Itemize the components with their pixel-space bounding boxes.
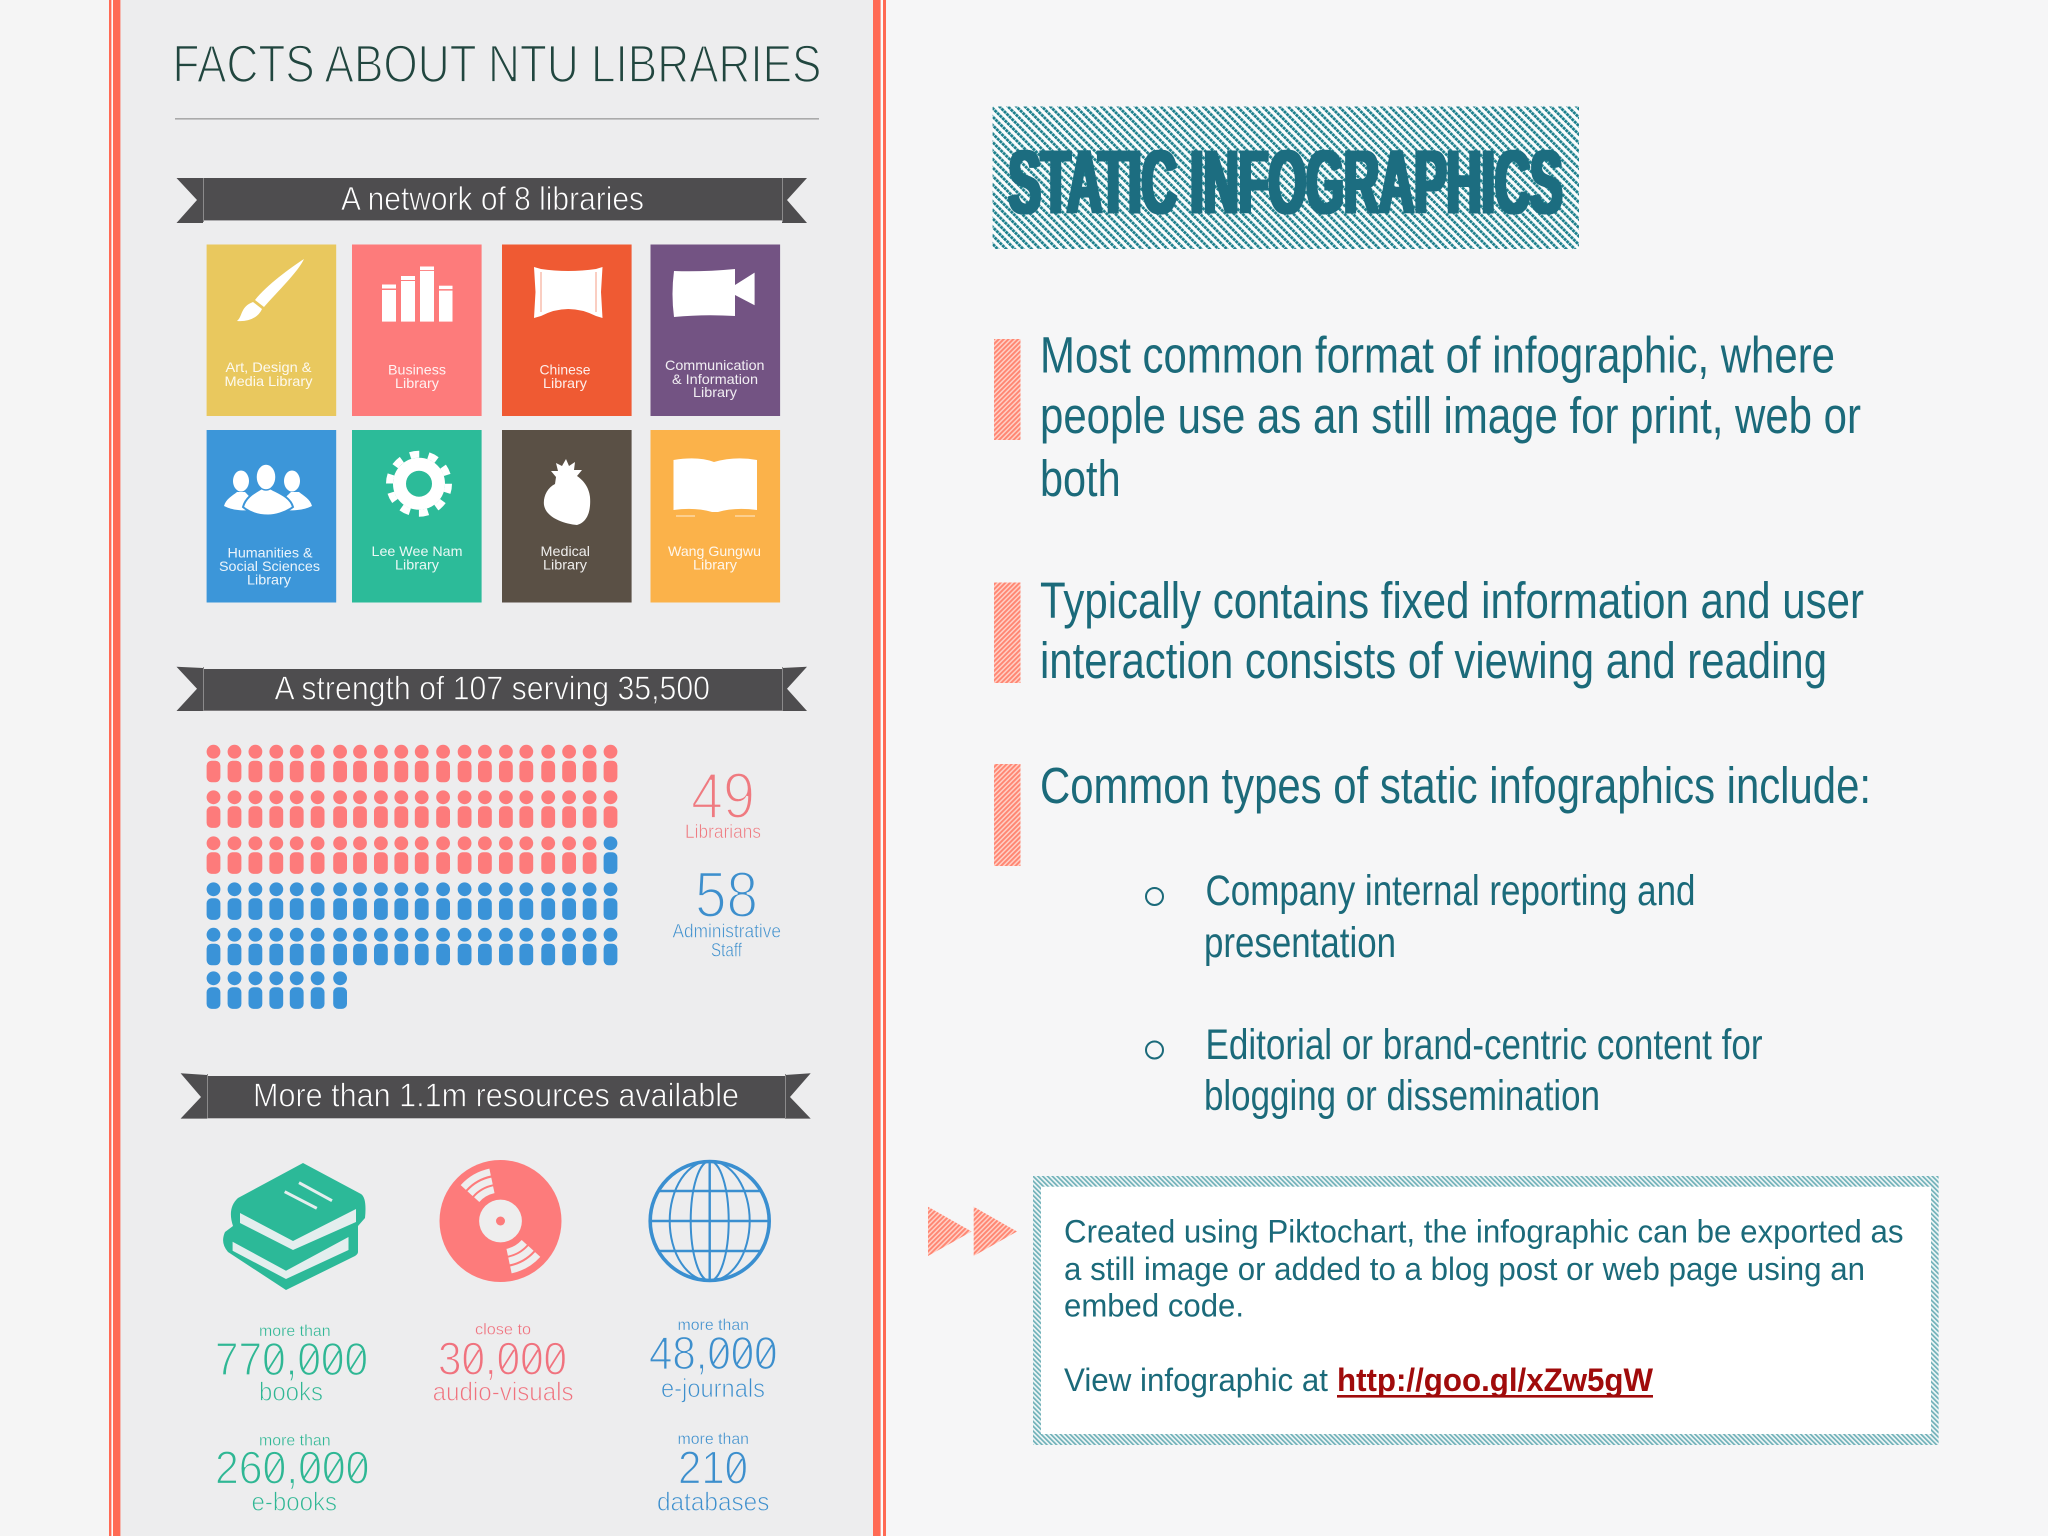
stat: 48,000 e-journals: more than [678,1317,749,1334]
stat: 48,000 e-journals: 48,000 [649,1327,778,1379]
stat: 260,000 e-books: more than [259,1433,331,1450]
tile label: Library [693,556,737,572]
stat: 30,000 audio-visuals: audio-visuals [433,1377,574,1407]
tile label [665,357,764,400]
tile label [219,545,320,588]
chart: staff people pictogram [207,745,620,1009]
stat: 49 librarians: Librarians [685,822,761,843]
sub bullet: company reporting: Company internal reporting and [1206,867,1696,915]
stat: 48,000 e-journals: e-journals [661,1373,765,1403]
text block: common types: Common types of static infographics include: [1040,757,1871,814]
icon: group of people [224,464,312,516]
library tile: Communication and Information [650,244,780,416]
tile label: Social Sciences [219,558,320,574]
library tile: Business [352,244,482,416]
tile label [540,543,590,572]
stat: 58 administrative staff: Staff [711,941,743,962]
bullet marker 2 [994,582,1020,683]
stat: 770,000 books [215,1323,368,1407]
tile label: Medical [540,543,590,559]
tile label: Library [693,384,737,400]
tile label: Business [388,361,446,377]
tile label [388,361,446,391]
icon: stacked books [223,1163,366,1290]
stat: 210 databases: more than [678,1431,749,1448]
tile label [372,543,462,572]
ribbon: strength of 107: A strength of 107 serving 35,500 [274,669,710,706]
text block: most common format: Most common format of infographic, where [1040,327,1835,384]
icon: open book [674,458,757,516]
library tile: Chinese [502,244,632,416]
tile label: Chinese [540,361,591,377]
stat: 770,000 books: books [259,1377,323,1407]
icon: vinyl disc [440,1160,562,1282]
tile label: Library [543,375,587,391]
stat: 210 databases: 210 [678,1441,748,1493]
bullet marker 1 [994,339,1020,440]
tile label [668,543,761,572]
library tile: Humanities and Social Sciences [207,430,336,602]
bullet marker 3 [994,764,1020,866]
stat: 210 databases [657,1431,769,1517]
text block: fixed information [1040,572,1864,689]
sub bullet: editorial content [1146,1021,1762,1120]
icon: paint brush [237,259,304,321]
tile label: Lee Wee Nam [372,543,462,559]
callout: created using Piktochart [1033,1176,1939,1445]
library tile: Wang Gungwu [650,430,780,602]
stat: 48,000 e-journals [649,1317,778,1403]
heading: static infographics: STATIC INFOGRAPHICS [1008,133,1562,233]
sub bullet: company reporting: presentation [1204,919,1396,967]
stat: 260,000 e-books [215,1433,369,1517]
tile label [540,361,591,391]
callout: created using Piktochart: Created using Piktochart, the infographic can be exported as [1064,1214,1904,1250]
icon: video camera [672,269,755,317]
icon: globe [650,1161,770,1281]
stat: 30,000 audio-visuals: close to [475,1321,531,1338]
library tile: Lee Wee Nam [352,430,482,602]
text block: most common format: both [1040,450,1121,507]
ribbon: network of 8 libraries [176,178,807,223]
stat: 260,000 e-books: e-books [252,1487,337,1517]
ribbon: 1.1m resources [181,1073,811,1119]
tile label: Library [247,572,291,588]
tile label [224,359,312,389]
library tile: Medical [502,430,632,602]
library tile: Art, Design and Media [207,244,336,416]
stat: 770,000 books: more than [259,1323,331,1340]
tile label: & Information [672,371,758,387]
stat: 58 administrative staff: Administrative [672,922,781,943]
tile label: Humanities & [228,545,313,561]
tile label: Wang Gungwu [668,543,761,559]
tile label: Library [395,375,439,391]
callout: created using Piktochart: a still image or added to a blog post or web page using an [1064,1251,1865,1287]
stat: 58 administrative staff [672,858,781,962]
callout: created using Piktochart: http://goo.gl/xZw5gW [1337,1362,1654,1398]
stat: 49 librarians: 49 [691,759,755,832]
stat: 58 administrative staff: 58 [695,858,758,931]
heading: static infographics [993,106,1579,249]
icon: heart [544,459,590,525]
stat: 30,000 audio-visuals: 30,000 [438,1332,567,1384]
sub bullet: company reporting [1146,867,1696,967]
tile label: Art, Design & [226,359,312,375]
ribbon: 1.1m resources: More than 1.1m resources available [253,1077,739,1114]
tile label: Communication [665,357,764,373]
callout: created using Piktochart: embed code. [1064,1288,1244,1324]
panel title: FACTS ABOUT NTU LIBRARIES [172,35,822,94]
icon: scroll [534,267,602,318]
icon: gear [390,454,448,513]
stat: 30,000 audio-visuals [433,1321,574,1407]
text block: most common format: people use as an still image for print, web or [1040,387,1861,444]
stat: 210 databases: databases [657,1487,769,1517]
tile label: Library [543,556,587,572]
tile label: Media Library [224,373,312,389]
text block: most common format [1040,327,1861,507]
stat: 770,000 books: 770,000 [215,1333,368,1385]
sub bullet: editorial content: blogging or dissemination [1204,1072,1600,1120]
ribbon: network of 8 libraries: A network of 8 libraries [341,180,644,217]
text block: fixed information: interaction consists of viewing and reading [1040,632,1827,689]
icon: bar chart [382,266,452,322]
icon: double arrow [928,1207,1017,1256]
sub bullet: editorial content: Editorial or brand-centric content for [1206,1021,1762,1069]
panel: facts about NTU libraries [0,0,886,1536]
tile label: Library [395,556,439,572]
ribbon: strength of 107 [176,667,807,711]
text block: fixed information: Typically contains fixed information and user [1040,572,1864,629]
stat: 260,000 e-books: 260,000 [215,1441,369,1493]
callout: created using Piktochart: View infographic at [1064,1362,1328,1398]
